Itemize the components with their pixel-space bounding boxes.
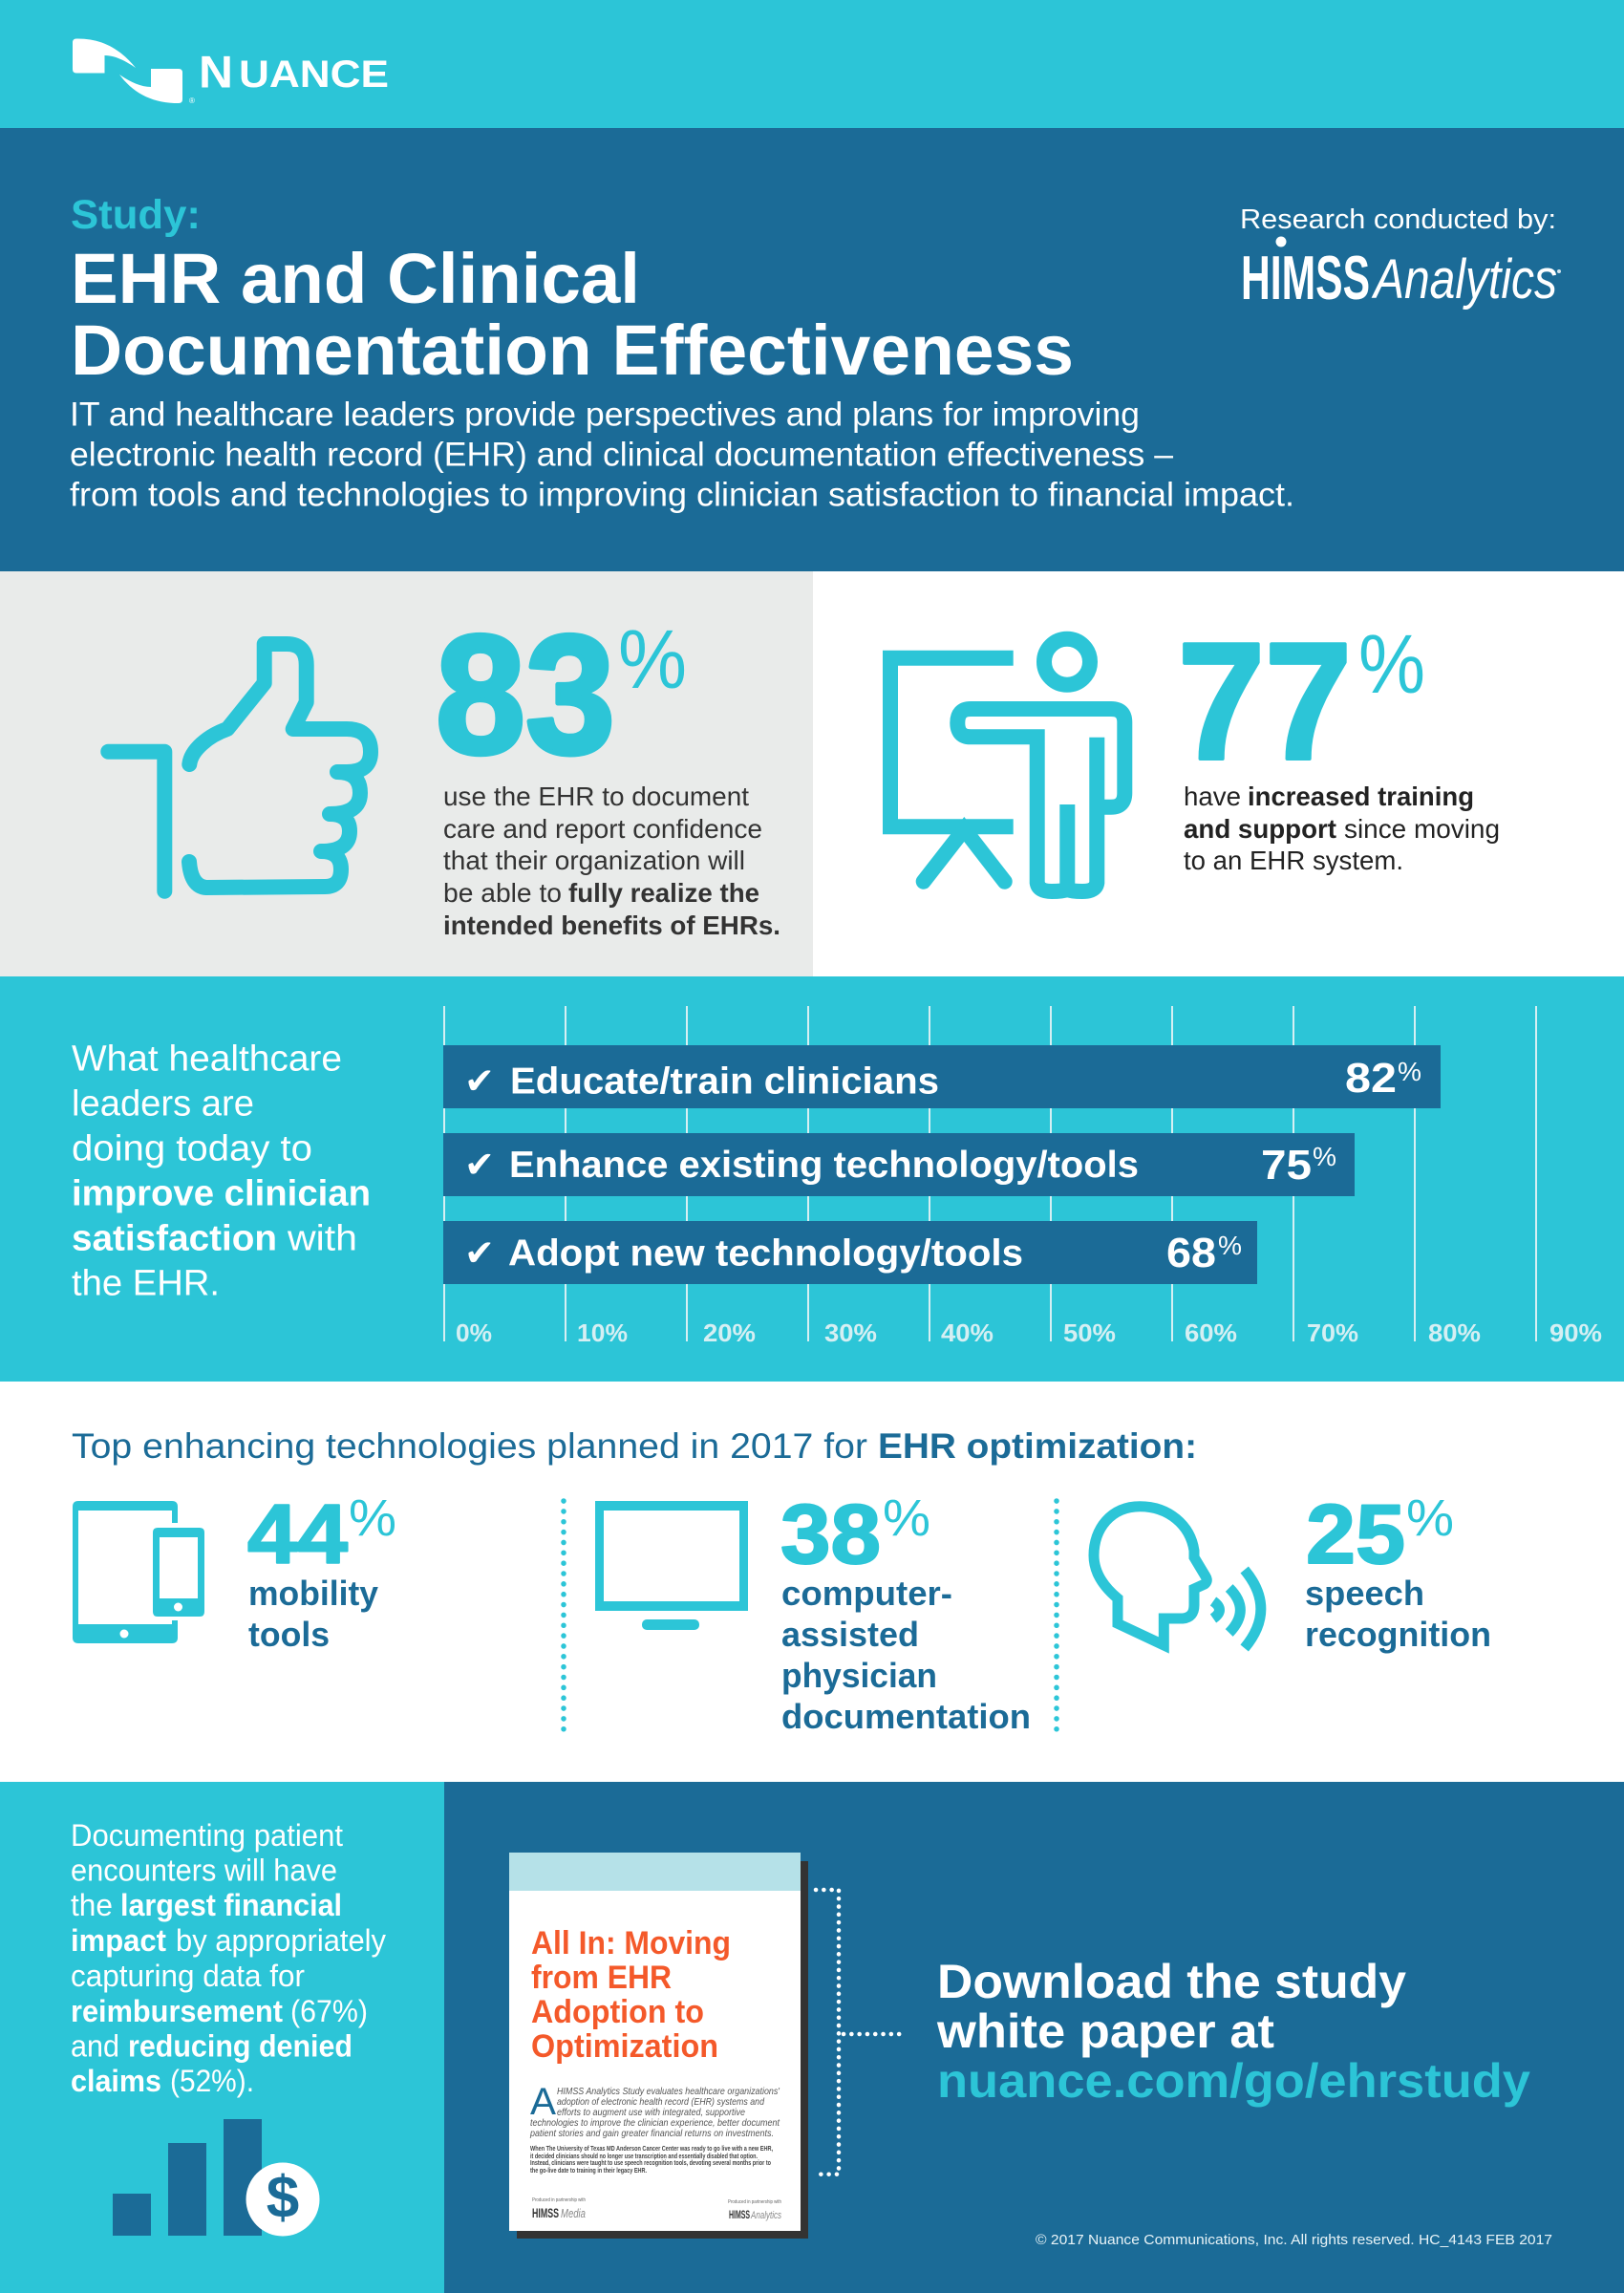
text block: financial impact: impact [71, 1923, 166, 1958]
text block: financial impact: Documenting patient [71, 1818, 343, 1853]
axis labels: 20% [703, 1318, 756, 1347]
panel: header [0, 128, 1624, 571]
white paper title: Adoption to [531, 1994, 704, 2030]
panel: clinician satisfaction [0, 976, 1624, 1382]
text block: 77 percent description: have [1184, 782, 1241, 811]
white paper body: patient stories and gain greater financial returns on investments. [529, 2128, 774, 2139]
text block: financial impact: (52%). [170, 2064, 254, 2098]
stat: 25 percent speech recognition: 25 [1306, 1487, 1405, 1581]
white paper body: Instead, clinicians were taught to use speech recognition tools, devoting several months prior to [530, 2158, 771, 2167]
axis labels: 90% [1549, 1318, 1602, 1347]
icon: Nuance logo: N [199, 46, 233, 97]
stat: 38 percent CAPD: physician [781, 1656, 937, 1695]
text block: financial impact: the [71, 1888, 113, 1922]
text block: what leaders are doing: doing today to [72, 1129, 312, 1169]
white paper title: Optimization [531, 2028, 718, 2065]
bar: educate/train clinicians 82%: Educate/train clinicians [510, 1061, 939, 1103]
number: 77 percent: 77 [1178, 608, 1352, 794]
text block: 83 percent description: intended benefits of EHRs. [443, 911, 780, 940]
text: research credit: Research conducted by: [1240, 204, 1556, 235]
text block: 77 percent description: since moving [1344, 814, 1500, 844]
text block: what leaders are doing: with [287, 1219, 357, 1259]
bar: enhance existing technology/tools 75%: % [1313, 1142, 1336, 1171]
text block: what leaders are doing: improve clinician [72, 1173, 371, 1213]
axis labels: 50% [1063, 1318, 1116, 1347]
bar: enhance existing technology/tools 75%: Enhance existing technology/tools [509, 1145, 1139, 1186]
panel: top logo band [0, 0, 1624, 129]
white paper body: When The University of Texas MD Anderson Cancer Center was ready to go live with a new EHR, [530, 2144, 773, 2153]
text block: financial impact: encounters will have [71, 1854, 337, 1888]
icon: HIMSS Analytics logo: HIMSS [1241, 243, 1370, 312]
icon: thumbs up [108, 644, 371, 891]
icon: HIMSS Analytics logo: Analytics [1372, 248, 1557, 311]
bar: adopt new technology/tools 68%: ✔ [464, 1232, 495, 1275]
call to action: white paper at [936, 2004, 1274, 2058]
stat: 25 percent speech recognition: speech [1305, 1574, 1424, 1613]
white paper body [529, 2081, 780, 2175]
bar chart [443, 1006, 1602, 1347]
text block: financial impact: capturing data for [71, 1959, 305, 1993]
text block: intro: electronic health record (EHR) and clinical documentation effectiveness – [70, 436, 1173, 474]
icon: monitor [595, 1501, 748, 1630]
white paper body: technologies to improve the clinician experience, better document [530, 2117, 780, 2129]
number: 83 percent: % [618, 613, 687, 706]
white paper partner logos: Media [561, 2206, 586, 2220]
stat: 38 percent CAPD: assisted [781, 1615, 919, 1654]
white paper body: it decided clinicians should no longer use transcription and essentially disabled that option. [530, 2152, 758, 2160]
white paper title: All In: Moving [531, 1925, 731, 1961]
stat: 38 percent CAPD: 38 [780, 1487, 881, 1581]
text block: financial impact: largest financial [120, 1888, 342, 1922]
white paper partner logos: Produced in partnership with [728, 2199, 781, 2205]
white paper body: A [530, 2081, 556, 2123]
icon: speaking head [1094, 1507, 1261, 1648]
heading: top enhancing technologies: Top enhancing technologies planned in 2017 for [72, 1426, 867, 1466]
bar: adopt new technology/tools 68% [443, 1221, 1257, 1284]
text block: what leaders are doing [72, 1039, 371, 1303]
copyright: © 2017 Nuance Communications, Inc. All rights reserved. HC_4143 FEB 2017 [1036, 2232, 1552, 2248]
axis labels: 30% [824, 1318, 877, 1347]
stat: 44 percent mobility tools: 44 [247, 1487, 348, 1581]
call to action: Download the study [937, 1955, 1406, 2008]
text block: what leaders are doing: satisfaction [72, 1219, 277, 1259]
icon: tablet and phone [73, 1501, 204, 1643]
text block: 83 percent description: fully realize the [568, 878, 759, 908]
white paper body: adoption of electronic health record (EHR) systems and [557, 2096, 765, 2108]
icon: presenter at board [890, 639, 1124, 891]
stat: 38 percent CAPD: computer- [781, 1574, 952, 1613]
text block: financial impact: and [71, 2029, 119, 2064]
icon: bars with dollar coin: $ [267, 2165, 299, 2231]
axis labels: 60% [1185, 1318, 1237, 1347]
panel: 77 percent stat [813, 571, 1624, 977]
text block: 83 percent description: be able to [443, 878, 562, 908]
title: EHR and Clinical [71, 239, 640, 318]
text block: 83 percent description [443, 782, 780, 940]
text block: intro [70, 396, 1294, 514]
stat: 44 percent mobility tools: % [349, 1489, 396, 1547]
white paper partner logos: HIMSS [532, 2205, 559, 2220]
axis labels: 70% [1307, 1318, 1358, 1347]
call to action: nuance.com/go/ehrstudy [937, 2054, 1530, 2108]
white paper body: HIMSS Analytics Study evaluates healthcare organizations' [557, 2086, 780, 2097]
icon: Nuance logo [73, 38, 389, 105]
text block: financial impact: claims [71, 2064, 161, 2098]
text block: what leaders are doing: the EHR. [72, 1263, 220, 1303]
stat: 38 percent CAPD: % [883, 1489, 930, 1547]
text block: 77 percent description: to an EHR system. [1184, 846, 1403, 875]
stat: 25 percent speech recognition: % [1406, 1489, 1454, 1547]
stat: 44 percent mobility tools [247, 1487, 396, 1654]
bar: adopt new technology/tools 68%: % [1218, 1231, 1242, 1260]
axis labels: 40% [941, 1318, 994, 1347]
panel: enhancing technologies [0, 1382, 1624, 1782]
text block: intro: from tools and technologies to improving clinician satisfaction to financial impact. [70, 476, 1294, 514]
heading: top enhancing technologies: EHR optimization: [878, 1426, 1197, 1466]
stat: 44 percent mobility tools: tools [248, 1615, 330, 1654]
text block: 77 percent description: increased training [1248, 782, 1474, 811]
text block: 83 percent description: care and report confidence [443, 814, 762, 844]
white paper cover [509, 1853, 808, 2239]
bar: enhance existing technology/tools 75% [443, 1133, 1355, 1196]
icon: HIMSS Analytics logo [1241, 237, 1561, 312]
text block: financial impact [71, 1818, 386, 2098]
dotted connector arrow [816, 1890, 907, 2175]
title: Documentation Effectiveness [71, 311, 1074, 390]
panel: 83 percent stat [0, 571, 813, 977]
white paper title: from EHR [531, 1960, 672, 1996]
icon: Nuance logo: ® [189, 96, 195, 105]
divider [561, 1501, 566, 1732]
bar: adopt new technology/tools 68%: 68 [1166, 1230, 1216, 1276]
white paper partner logos: Analytics [750, 2210, 781, 2221]
white paper title [531, 1925, 731, 2065]
heading: study label: Study: [71, 192, 201, 238]
white paper partner logos: HIMSS [729, 2208, 750, 2221]
icon: bars with dollar coin [113, 2119, 319, 2236]
bar: adopt new technology/tools 68%: Adopt new technology/tools [508, 1232, 1023, 1275]
bar: enhance existing technology/tools 75%: ✔ [464, 1144, 495, 1186]
text block: financial impact: reimbursement [71, 1994, 283, 2028]
text block: what leaders are doing: What healthcare [72, 1039, 342, 1080]
text block: financial impact: reducing denied [128, 2029, 353, 2064]
axis labels: 80% [1428, 1318, 1481, 1347]
title [71, 239, 1074, 390]
white paper partner logos [532, 2197, 781, 2221]
panel: download [444, 1782, 1624, 2293]
axis labels: 10% [577, 1318, 628, 1347]
white paper body: efforts to augment use with integrated, supportive [557, 2107, 745, 2118]
stat: 25 percent speech recognition [1305, 1487, 1491, 1654]
stat: 38 percent CAPD: documentation [781, 1697, 1031, 1736]
text block: 83 percent description: use the EHR to document [443, 782, 749, 811]
number: 83 percent: 83 [436, 600, 615, 789]
bar: educate/train clinicians 82%: ✔ [464, 1061, 495, 1103]
stat: 25 percent speech recognition: recognition [1305, 1615, 1491, 1654]
white paper partner logos: Produced in partnership with [532, 2197, 586, 2203]
text block: financial impact: (67%) [290, 1994, 368, 2028]
text block: intro: IT and healthcare leaders provide perspectives and plans for improving [70, 396, 1140, 434]
white paper body: the go-live date to training in their legacy EHR. [530, 2166, 647, 2175]
text block: 77 percent description [1184, 782, 1500, 875]
bar: educate/train clinicians 82%: % [1398, 1057, 1421, 1086]
stat: 38 percent CAPD [780, 1487, 1031, 1736]
text block: financial impact: by appropriately [176, 1923, 386, 1958]
heading: top enhancing technologies [72, 1426, 1197, 1466]
axis labels: 0% [456, 1318, 492, 1347]
stat: 44 percent mobility tools: mobility [248, 1574, 378, 1613]
text block: 77 percent description: and support [1184, 814, 1336, 844]
divider [1054, 1501, 1059, 1732]
panel: financial impact [0, 1782, 444, 2293]
bar: enhance existing technology/tools 75%: 75 [1261, 1142, 1312, 1189]
axis labels [456, 1318, 1602, 1347]
icon: Nuance logo: UANCE [239, 54, 389, 96]
bar: educate/train clinicians 82%: 82 [1345, 1055, 1397, 1102]
text block: what leaders are doing: leaders are [72, 1083, 254, 1124]
number: 77 percent: % [1358, 618, 1425, 711]
call to action [936, 1955, 1530, 2108]
text block: 83 percent description: that their organization will [443, 846, 745, 875]
bar: educate/train clinicians 82% [443, 1045, 1441, 1108]
